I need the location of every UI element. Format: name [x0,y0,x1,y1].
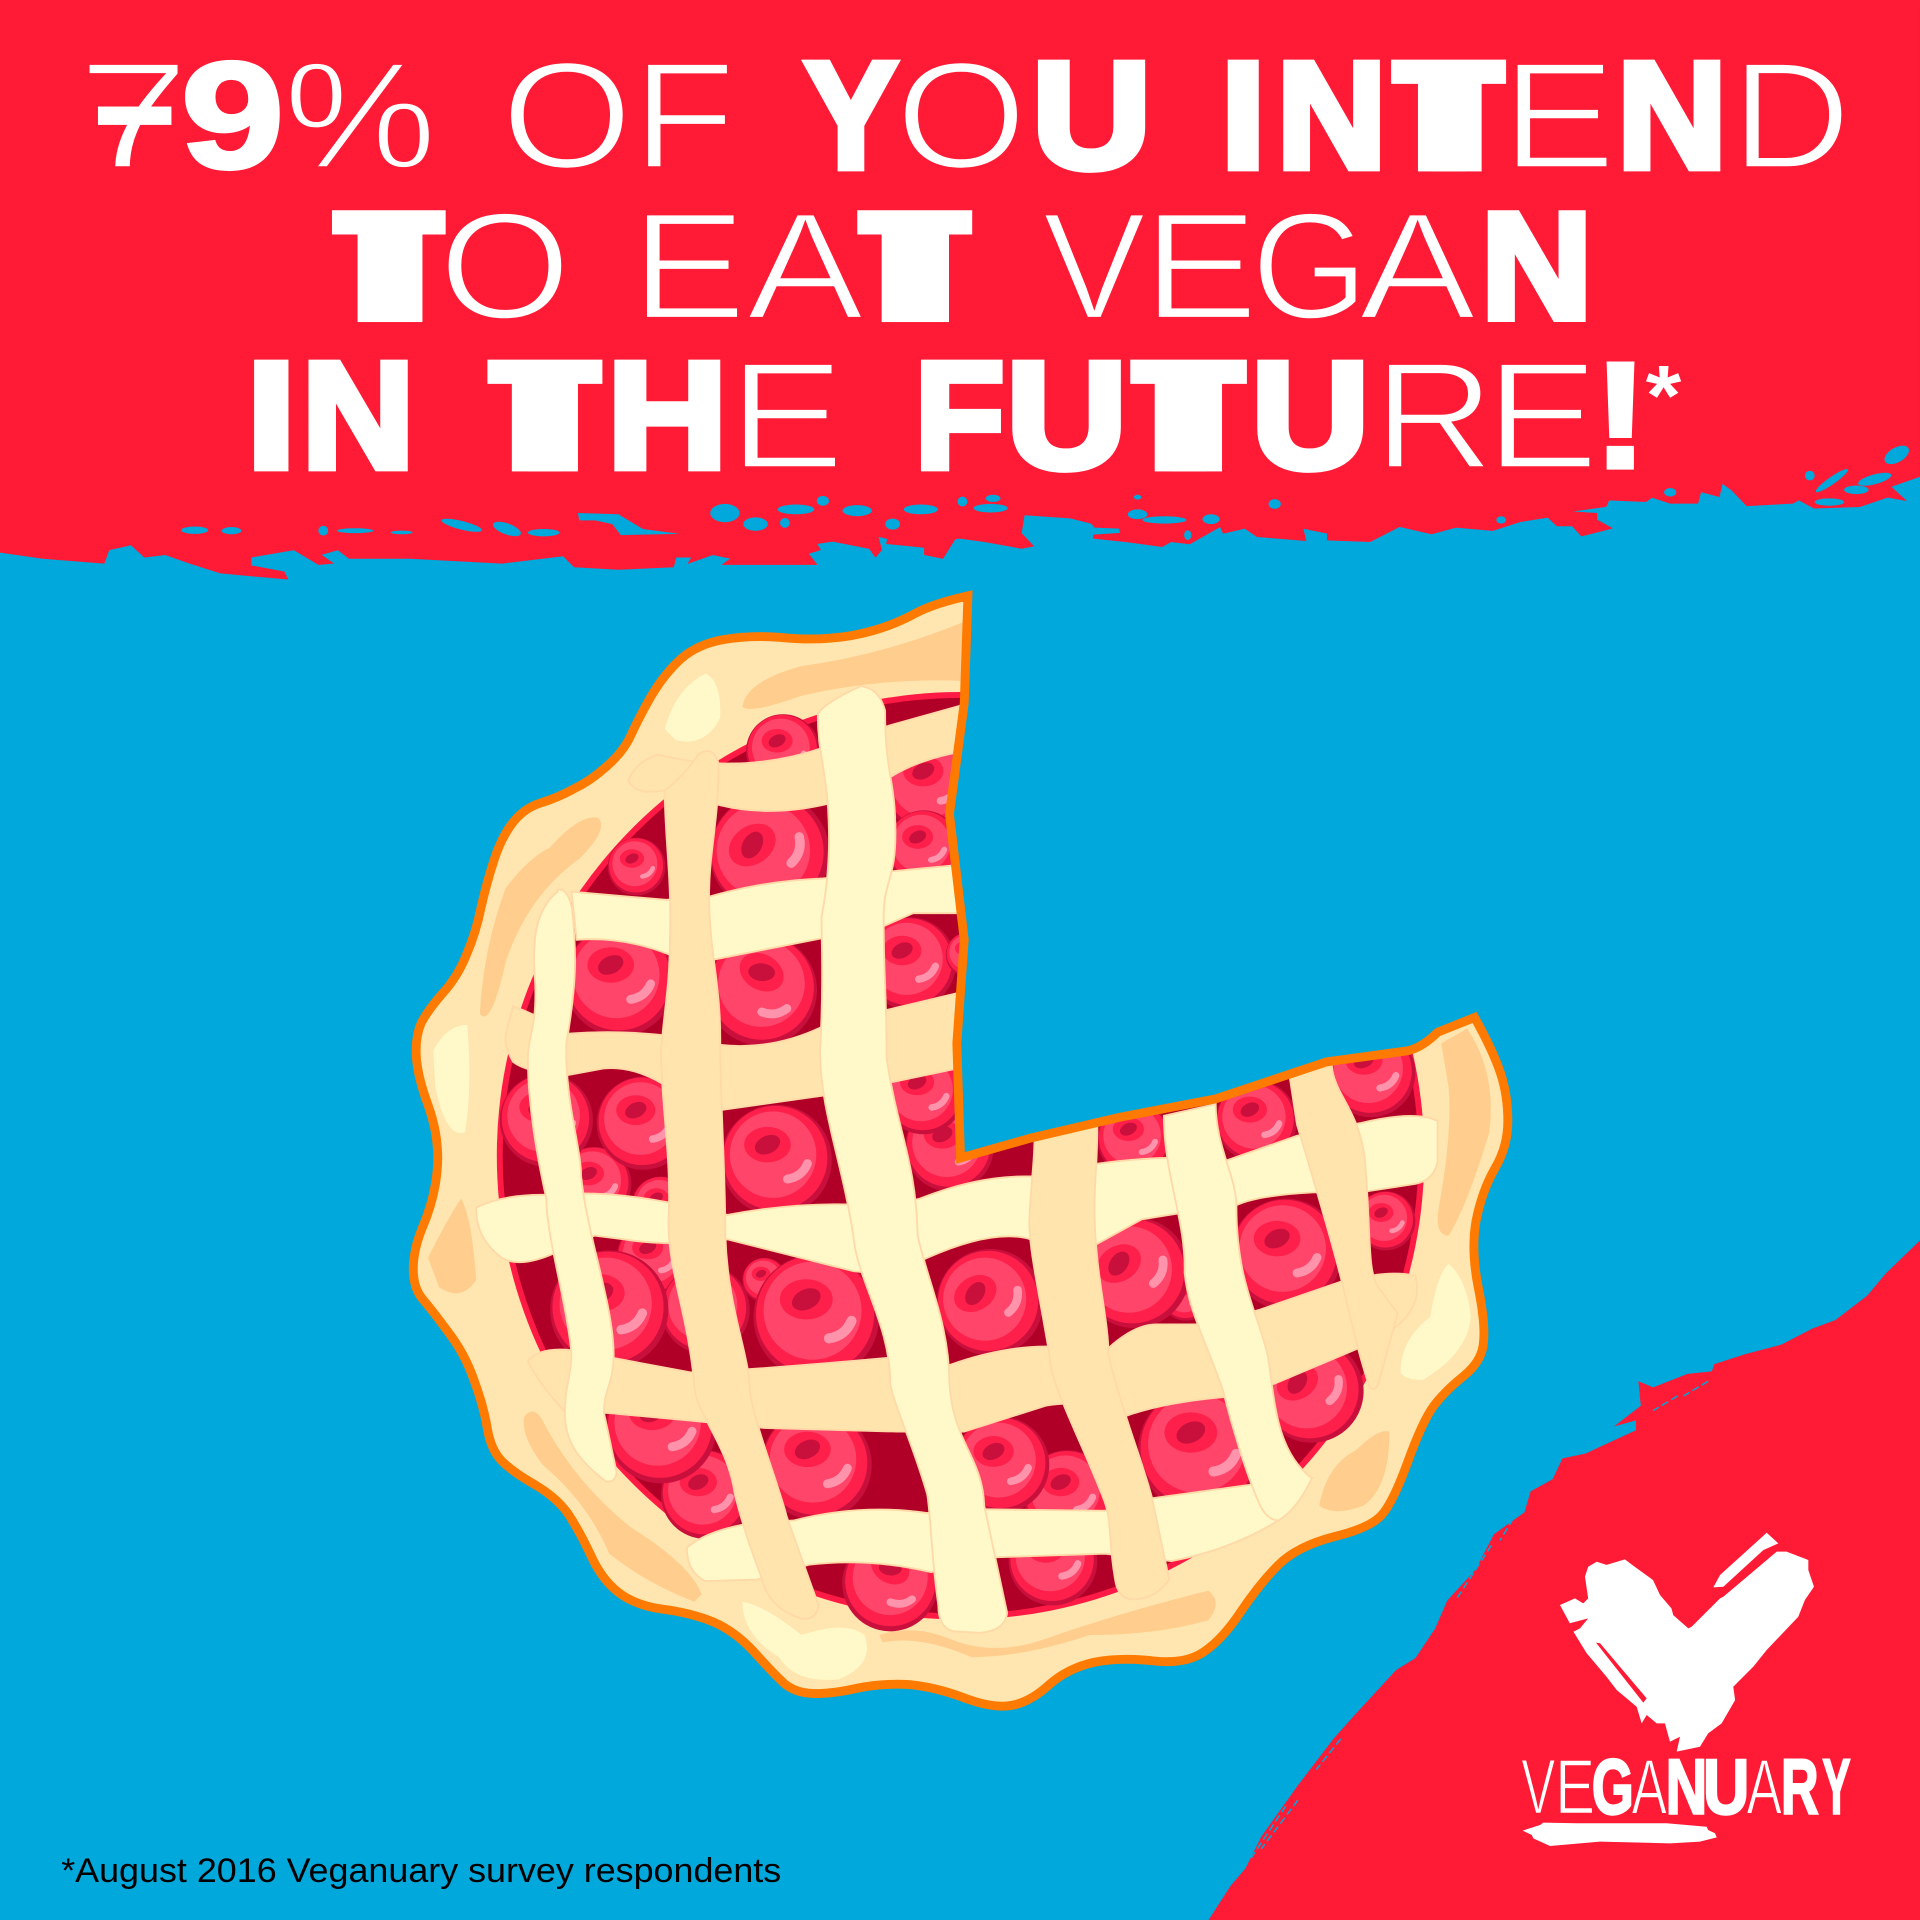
headline line 2: E [631,182,746,351]
horizontal lattice strips [476,705,1438,1581]
pie crust base [413,596,1508,1706]
headline line 2: A [747,182,864,351]
headline line 1: T [1393,32,1504,201]
headline line 2: O [439,182,571,351]
logo wordmark: U [1703,1742,1749,1830]
headline line 3: F [915,332,1004,501]
logo wordmark: G [1592,1742,1634,1830]
headline line 1: O [501,32,632,201]
headline line 2: G [1251,182,1368,351]
headline line 1: O [896,32,1027,201]
logo wordmark: Y [1823,1742,1850,1830]
headline line 3: R [1374,332,1494,501]
headline line 3: H [607,332,727,501]
headline line 1: % [284,32,437,201]
headline line 2: N [1481,182,1592,351]
crust shading [428,622,1491,1680]
logo wordmark: R [1781,1742,1819,1830]
cherry filling [497,692,1424,1649]
logo wordmark: A [1746,1742,1782,1830]
headline line 3: E [729,332,844,501]
headline line 1: I [1221,32,1266,201]
headline line 2: T [860,182,970,351]
headline line 1: U [1032,32,1151,201]
headline line 1: E [1502,32,1615,201]
headline line 3: * [1646,348,1682,444]
bottom-right red brush corner [1209,1240,1920,1920]
pie orange outline [413,596,1508,1706]
headline line 3: I [246,332,296,501]
headline line 3: N [302,332,414,501]
headline line 2: V [1043,182,1146,351]
headline line 2: T [334,182,443,351]
Veganuary logo [1521,1533,1850,1846]
logo wordmark: V [1521,1742,1555,1830]
headline line 3: U [1006,332,1127,501]
headline line 1: F [633,32,735,201]
logo wordmark: N [1666,1742,1707,1830]
logo wordmark [1521,1742,1850,1830]
survey footnote: *August 2016 Veganuary survey respondents [61,1852,781,1890]
headline line 1: 9 [181,32,284,201]
blue dry-brush streaks on red corner [1249,1381,1708,1861]
logo wordmark: A [1632,1742,1668,1830]
headline line 3: T [490,332,600,501]
logo wordmark: E [1555,1742,1595,1830]
pastry lattice strips [476,686,1438,1633]
headline line 3: U [1251,332,1369,501]
illustration: cherry lattice pie with a slice removed [413,596,1508,1706]
headline line 3: T [1133,332,1244,501]
headline line 2: E [1143,182,1258,351]
headline line 1: 7 [77,32,190,201]
top red torn banner [0,0,1920,579]
vertical lattice strips [528,686,1398,1633]
headline line 1: N [1277,32,1386,201]
headline line 2: A [1359,182,1476,351]
headline [77,32,1851,501]
headline line 2 [334,182,1592,351]
headline line 3: ! [1593,332,1648,501]
headline line 1: D [1731,32,1851,201]
headline line 3 [246,332,1682,501]
headline line 1 [77,32,1851,201]
headline line 1: N [1617,32,1727,201]
headline line 1: Y [804,32,897,201]
icon: brush heart [1560,1533,1814,1752]
logo brush underline [1523,1823,1717,1846]
headline line 3: E [1486,332,1598,501]
blue paint flecks along banner edge [181,442,1912,540]
